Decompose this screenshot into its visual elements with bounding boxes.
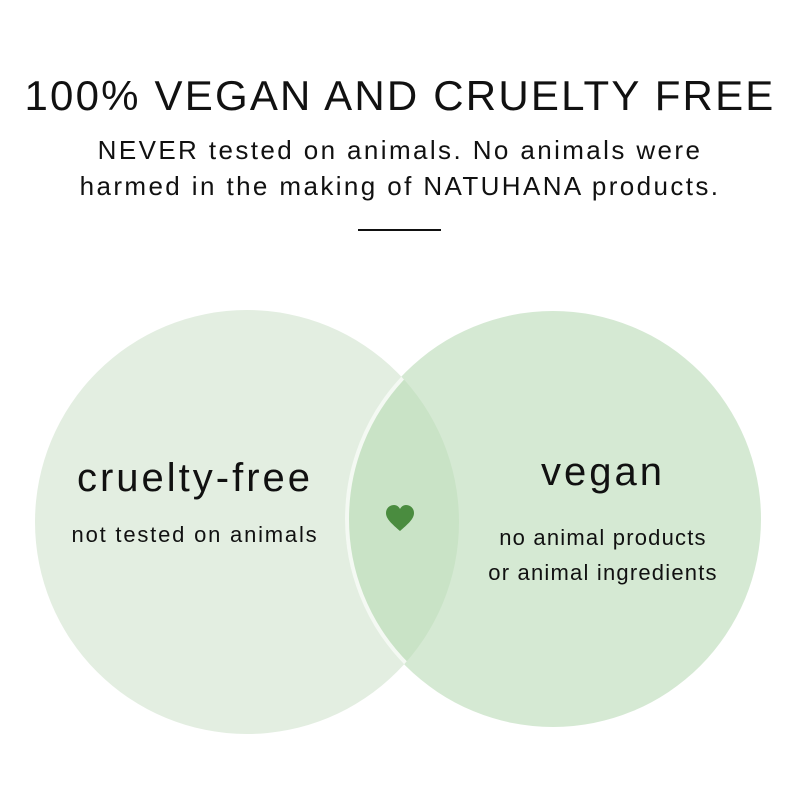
- subtitle: harmed in the making of NATUHANA products.: [80, 171, 720, 201]
- text: vegan description: no animal products: [499, 525, 707, 550]
- divider: [358, 229, 441, 231]
- text: vegan description: or animal ingredients: [488, 560, 718, 585]
- subtitle: [80, 135, 720, 201]
- label: cruelty-free: cruelty-free: [77, 456, 313, 500]
- text: vegan description: [488, 525, 718, 585]
- circle: vegan: [345, 311, 761, 727]
- text: not tested: not tested on animals: [72, 522, 318, 547]
- venn diagram: [35, 310, 761, 734]
- label: vegan: vegan: [541, 450, 665, 494]
- subtitle: NEVER tested on animals. No animals were: [98, 135, 702, 165]
- circle: cruelty-free: [35, 310, 459, 734]
- icon: heart: [386, 505, 414, 531]
- title: 100% VEGAN AND CRUELTY FREE: [24, 72, 776, 119]
